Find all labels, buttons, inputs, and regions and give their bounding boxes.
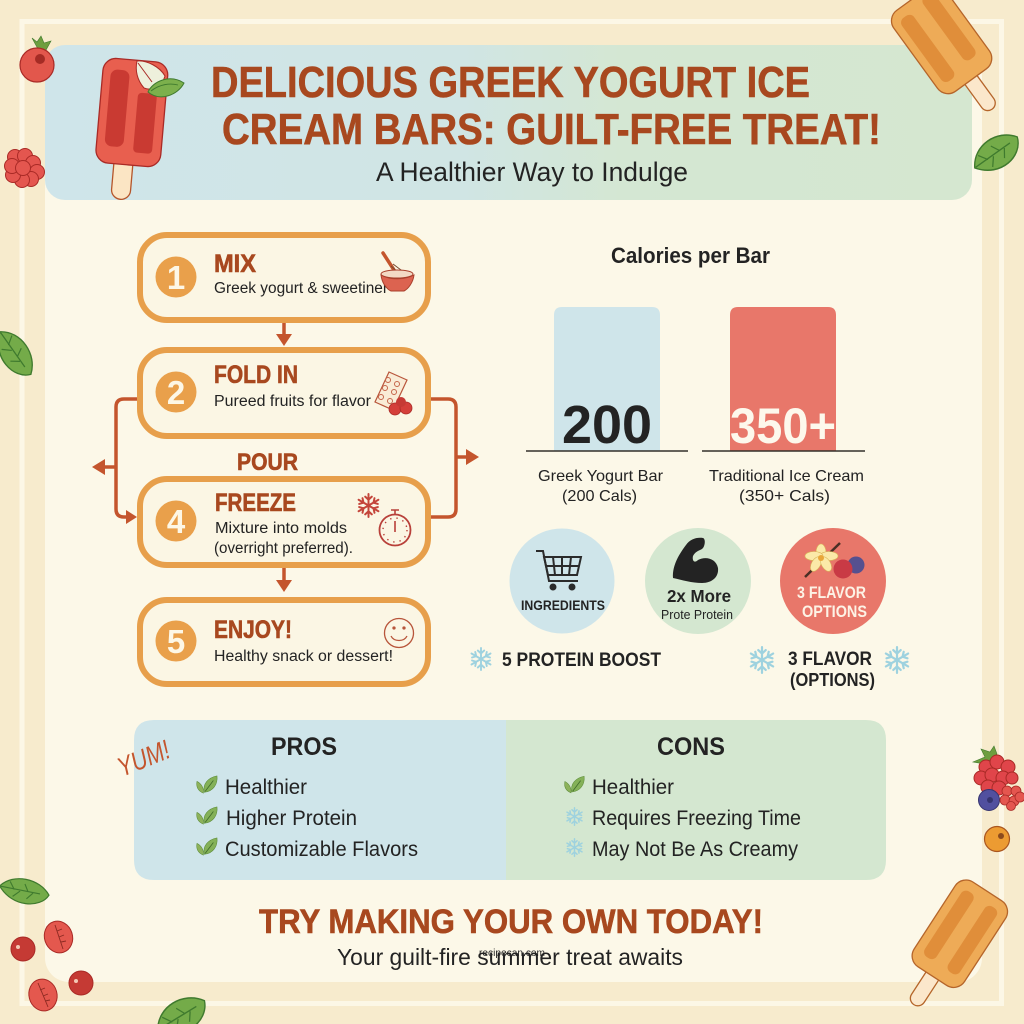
icon: flexed arm (673, 538, 718, 583)
panel: cons (506, 720, 886, 880)
panel: pros and cons (134, 720, 886, 880)
panel: pros: Customizable Flavors (225, 838, 418, 861)
chart title: Calories per Bar (611, 243, 770, 268)
icon: red popsicle (92, 57, 184, 203)
step 1: mix (140, 235, 428, 320)
step 3 label: pour: POUR (237, 449, 298, 476)
bar: greek yogurt: 200 (562, 395, 652, 455)
bar labels: Traditional Ice Cream (709, 468, 864, 485)
icon: orange popsicle bottom right (889, 875, 1012, 1021)
callout: flavor options: (OPTIONS) (790, 670, 875, 690)
panel: pros: PROS (271, 733, 337, 761)
icon: raspberry left (4, 148, 44, 188)
chart: calories per bar (526, 243, 865, 505)
icon: mixed berries right (973, 746, 1024, 852)
icon: smiley (384, 618, 414, 648)
step 2: fold in: 2 (167, 374, 185, 411)
step 5: enjoy (140, 600, 428, 684)
step 2: fold in: FOLD IN (214, 361, 298, 389)
badge: flavors (780, 528, 886, 634)
badge: flavors: OPTIONS (802, 603, 867, 621)
step 1: mix: MIX (214, 250, 256, 278)
bar: traditional ice cream (730, 307, 836, 454)
step 4: freeze: FREEZE (215, 489, 296, 517)
badge: ingredients (510, 528, 614, 634)
icon: leaf bottom (150, 989, 213, 1024)
panel: pros: Healthier (225, 776, 307, 799)
bar labels (538, 468, 864, 505)
icon: cranberry top left (20, 36, 54, 82)
badge: protein: Prote Protein (661, 608, 733, 622)
bar labels: (200 Cals) (562, 488, 637, 505)
icon: leaf bottom left (0, 874, 51, 909)
icon: berries bottom left (11, 917, 93, 1014)
panel: cons: Healthier (592, 776, 674, 799)
icon: mold and berries (375, 372, 412, 415)
title (211, 58, 881, 154)
callout: protein boost: 5 PROTEIN BOOST (502, 650, 661, 671)
step 5: enjoy: 5 (167, 623, 185, 660)
icon: snowflake and timer (357, 494, 410, 546)
badge: flavors: 3 FLAVOR (797, 584, 866, 602)
title: CREAM BARS: GUILT-FREE TREAT! (222, 105, 881, 154)
panel: pros: Higher Protein (226, 807, 357, 830)
step 4: freeze: 4 (167, 503, 186, 540)
callout: flavor options (749, 647, 910, 690)
connector arrows (92, 323, 479, 592)
panel: process steps (92, 235, 479, 684)
step 5: enjoy: Healthy snack or dessert! (214, 648, 393, 665)
callout: yum: YUM! (113, 734, 175, 783)
icon: cart (536, 551, 581, 590)
panel: cons: CONS (657, 733, 725, 761)
step 2: fold in (140, 350, 428, 436)
bar: traditional ice cream: 350+ (730, 398, 836, 454)
badge: protein (645, 528, 751, 634)
bar: greek yogurt (554, 307, 660, 455)
badge: ingredients: INGREDIENTS (521, 598, 605, 613)
step 1: mix: 1 (167, 259, 185, 296)
icon: orange popsicle top right (886, 0, 1018, 128)
panel: cons: May Not Be As Creamy (592, 838, 798, 861)
callout: flavor options: 3 FLAVOR (788, 649, 872, 670)
call to action: TRY MAKING YOUR OWN TODAY! (259, 903, 763, 941)
step 4: freeze: (overright preferred). (214, 540, 353, 557)
icon: bowl and whisk (381, 253, 414, 291)
call to action (259, 903, 763, 970)
step 2: fold in: Pureed fruits for flavor (214, 393, 371, 410)
icon: leaf right (966, 127, 1024, 180)
step 1: mix: Greek yogurt & sweetiner (214, 280, 388, 297)
step 4: freeze (140, 479, 428, 565)
header banner (45, 45, 972, 200)
call to action: Your guilt-fire summer treat awaits (337, 944, 683, 970)
call to action: recipecan.com (479, 947, 545, 959)
panel: pros (134, 720, 506, 880)
panel: cons: Requires Freezing Time (592, 807, 801, 830)
icon: vanilla and berries (805, 543, 864, 578)
step 4: freeze: Mixture into molds (215, 520, 347, 537)
step 5: enjoy: ENJOY! (214, 616, 292, 644)
bar labels: Greek Yogurt Bar (538, 468, 664, 485)
bar labels: (350+ Cals) (739, 488, 830, 505)
icon: leaf left (0, 324, 40, 383)
title: DELICIOUS GREEK YOGURT ICE (211, 58, 810, 107)
badge: protein: 2x More (667, 586, 731, 606)
subtitle: A Healthier Way to Indulge (376, 157, 688, 187)
